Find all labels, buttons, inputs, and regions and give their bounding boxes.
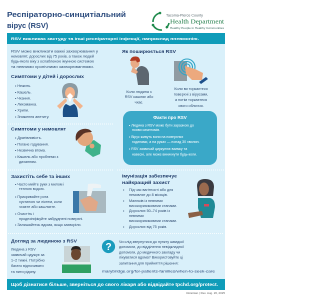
logo: health department: Tacoma-Pierce County bbox=[166, 14, 203, 18]
text: coughing caption: чхає. bbox=[135, 100, 143, 104]
list: immunization: високоризиковими станами. bbox=[129, 204, 177, 208]
list: symptoms adults: • Зниження апетиту. bbox=[15, 115, 49, 119]
list: immunization: Малюків із певними bbox=[129, 199, 163, 203]
text: care: багато відпочивати bbox=[11, 264, 44, 268]
intro text: та певними хронічними захворюваннями. bbox=[11, 65, 94, 69]
title: вірус (RSV) bbox=[7, 21, 49, 30]
list: immunization: • bbox=[123, 225, 125, 229]
panel: RSV facts: Факти про RSV bbox=[153, 115, 187, 120]
intro text bbox=[11, 49, 98, 69]
list: symptoms adults bbox=[15, 84, 49, 119]
list: immunization: • bbox=[123, 209, 125, 213]
icon: person sneezing bbox=[57, 83, 83, 117]
list: symptoms infants: • Дратівливість. bbox=[15, 136, 42, 140]
list: immunization: Під час вагітності або для bbox=[129, 188, 173, 192]
divider bbox=[8, 169, 114, 171]
header band: RSV викликає застуду та інші респіраторні інфекції, наприклад пневмонію. bbox=[11, 36, 199, 41]
icon: vaccinated woman bbox=[188, 179, 215, 218]
icon: hand touching surface bbox=[174, 59, 208, 84]
divider bbox=[8, 123, 114, 125]
list: symptoms adults: • Хрипи. bbox=[15, 109, 29, 113]
list: protect: теплою водою. bbox=[19, 187, 45, 191]
title: Респіраторно-синцитіальний bbox=[7, 10, 127, 19]
intro text: RSV може викликати важкі захворювання у bbox=[11, 49, 98, 53]
header band bbox=[7, 33, 225, 44]
heading: symptoms infants: Симптоми у немовлят bbox=[11, 126, 67, 132]
text: coughing caption: RSV кашляє або bbox=[125, 95, 153, 99]
text: touching caption: поверхні з вірусами, bbox=[174, 92, 208, 96]
list: immunization: Дорослих 50–74 років із bbox=[129, 209, 170, 213]
text: touching caption: а потім торкаєтеся bbox=[175, 98, 207, 102]
panel: RSV facts bbox=[123, 111, 217, 165]
icon: person in bed bbox=[62, 246, 91, 273]
link: url: marybridge.org/for-patients-families/when-to-seek-care bbox=[102, 270, 215, 274]
list: protect: продезінфікуйте забруднені поверхні. bbox=[19, 217, 83, 221]
list: symptoms adults: • Чхання. bbox=[15, 96, 31, 100]
intro text: немовлят, дорослих від 75 років, а також людей bbox=[11, 54, 94, 58]
text: touching caption: Коли ви торкаєтеся bbox=[174, 87, 208, 91]
panel: RSV facts: годинами, а на руках — понад 30 хвилин. bbox=[132, 140, 200, 144]
list: protect: хустиною чи ліктем, коли bbox=[19, 200, 62, 204]
icon: washing hands bbox=[73, 184, 106, 213]
background panel bbox=[7, 44, 225, 279]
list: immunization: • bbox=[123, 199, 125, 203]
text: coughing caption bbox=[125, 90, 153, 104]
list: symptoms adults: • Кашель. bbox=[15, 90, 32, 94]
text: question bbox=[119, 240, 184, 266]
heading: immunization bbox=[122, 173, 178, 185]
icon: baby bbox=[76, 129, 101, 157]
panel: RSV facts: • Вірус живуть вони на поверхнях bbox=[129, 135, 183, 139]
list: symptoms adults: • Нежить. bbox=[15, 84, 31, 88]
logo: health department bbox=[152, 12, 225, 30]
list: protect: • Залишайтесь вдома, якщо захворіли. bbox=[15, 223, 81, 227]
text: care: Людина з RSV bbox=[11, 248, 36, 252]
list: symptoms infants: • Кашель або проблеми з bbox=[15, 155, 59, 159]
list: immunization: • bbox=[123, 188, 125, 192]
divider bbox=[8, 232, 224, 234]
logo: health department: Healthy People in Healthy Communities bbox=[170, 27, 225, 30]
list: symptoms adults: • Лихоманка. bbox=[15, 103, 37, 107]
text: question: запитання для прийняття рішення: bbox=[119, 262, 178, 266]
bottom band: Щоб дізнатися більше, зверніться до свого лікаря або відвідайте tpchd.org/protect. bbox=[11, 282, 218, 287]
text: question: допомоги, до медичного закладу чи bbox=[119, 251, 180, 255]
text: question: Чи слід звернутися до пункту швидкої bbox=[119, 240, 184, 244]
icon: question mark bbox=[102, 240, 115, 253]
list: immunization: немовлят до 8 місяців. bbox=[129, 193, 168, 197]
heading: immunization: Імунізація забезпечує bbox=[122, 173, 178, 179]
list: symptoms infants bbox=[15, 136, 59, 164]
text: coughing caption: Коли людина з bbox=[126, 90, 152, 94]
list: symptoms infants: • Погане годування. bbox=[15, 143, 49, 147]
heading: spread: Як поширюється RSV bbox=[122, 49, 177, 54]
panel: RSV facts: • Людина з RSV може бути заразною до bbox=[129, 123, 194, 127]
logo: health department: Health Department bbox=[170, 18, 224, 26]
list: protect: чхаєте або кашляєте. bbox=[19, 205, 56, 209]
list: immunization: певними bbox=[129, 214, 144, 218]
icon: man coughing bbox=[130, 56, 149, 85]
list: symptoms infants: диханням. bbox=[19, 160, 37, 164]
bottom band bbox=[7, 279, 225, 290]
text: care: та пити рідину. bbox=[11, 270, 36, 274]
panel: RSV facts: • RSV зазвичай циркулює взимку та bbox=[129, 147, 187, 151]
text: care: 1–2 тижні. Потрібно bbox=[11, 258, 45, 262]
list: immunization: Дорослих від 75 років. bbox=[129, 225, 167, 229]
list: protect bbox=[15, 183, 83, 227]
text: care: зазвичай одужує за bbox=[11, 253, 45, 257]
list: immunization: високоризиковими станами. bbox=[129, 219, 177, 223]
footer note: Ukrainian | Rev. Aug. 26, 2025 bbox=[186, 291, 225, 295]
list: protect: • Очистіть і bbox=[15, 212, 34, 216]
divider bbox=[117, 169, 224, 171]
text: touching caption: свого обличчя. bbox=[178, 104, 204, 108]
heading: immunization: найкращий захист bbox=[122, 179, 171, 185]
text: question: лікуватися вдома? Використовуйте ці bbox=[119, 256, 183, 260]
list: symptoms infants: • Незвична втома. bbox=[15, 149, 46, 153]
heading: protect: Захистіть себе та інших bbox=[11, 173, 70, 179]
text: care bbox=[11, 248, 45, 274]
list: protect: • Часто мийте руки з милом і bbox=[15, 183, 64, 187]
text: touching caption bbox=[174, 87, 208, 108]
intro text: будь-якого віку з ослабленою імунною системою bbox=[11, 60, 94, 64]
list: protect: • Прикривайте рота bbox=[15, 195, 49, 199]
icon: question mark: ? bbox=[105, 242, 112, 253]
heading: symptoms adults: Симптоми у дітей і дорослих bbox=[11, 73, 84, 79]
panel: RSV facts: появи симптомів. bbox=[132, 128, 160, 132]
title bbox=[7, 10, 127, 30]
text: question: допомоги, до відділення невідкладної bbox=[119, 245, 184, 249]
list: immunization bbox=[123, 188, 177, 229]
heading: care: Догляд за людиною з RSV bbox=[11, 238, 78, 244]
panel: RSV facts: навесні, але може виникнути будь-коли. bbox=[132, 152, 197, 156]
